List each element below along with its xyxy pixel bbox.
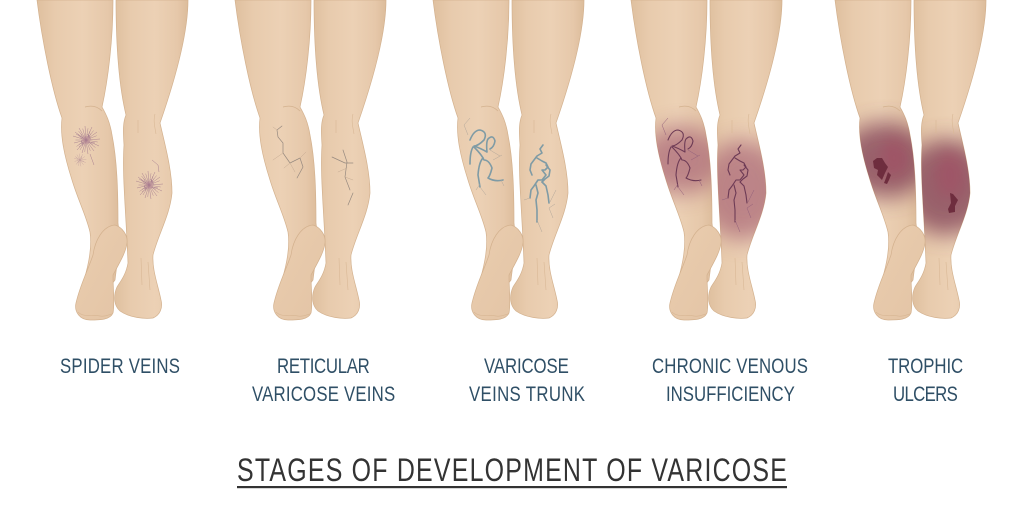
label: trophic ulcers: TROPHIC xyxy=(888,355,963,379)
label: reticular varicose veins: VARICOSE VEINS xyxy=(252,383,395,407)
label: trophic ulcers: ULCERS xyxy=(893,383,958,407)
label: spider veins: SPIDER VEINS xyxy=(60,355,180,379)
label: varicose veins trunk xyxy=(469,355,585,407)
panel: reticular varicose veins legs xyxy=(235,0,386,320)
panel: spider veins legs xyxy=(37,0,188,320)
panel: chronic venous insufficiency legs xyxy=(631,0,784,320)
panel: trophic ulcers legs xyxy=(835,0,992,320)
label: chronic venous insufficiency: CHRONIC VENOUS xyxy=(652,355,808,379)
label: chronic venous insufficiency: INSUFFICIENCY xyxy=(666,383,795,407)
reticular veins xyxy=(273,126,353,205)
dark veins xyxy=(668,130,748,222)
title: STAGES OF DEVELOPMENT OF VARICOSE xyxy=(237,453,787,489)
panel: varicose veins trunk legs xyxy=(433,0,584,320)
skin discolouration xyxy=(840,122,992,235)
label: reticular varicose veins: RETICULAR xyxy=(277,355,370,379)
spider vein clusters xyxy=(72,126,163,199)
label: varicose veins trunk: VEINS TRUNK xyxy=(469,383,585,407)
varicose trunk veins xyxy=(470,130,550,222)
skin discolouration xyxy=(640,126,784,240)
label: chronic venous insufficiency xyxy=(652,355,808,407)
label: reticular varicose veins xyxy=(252,355,395,407)
ulcers xyxy=(873,158,958,213)
label: trophic ulcers xyxy=(888,355,963,407)
label: varicose veins trunk: VARICOSE xyxy=(484,355,569,379)
